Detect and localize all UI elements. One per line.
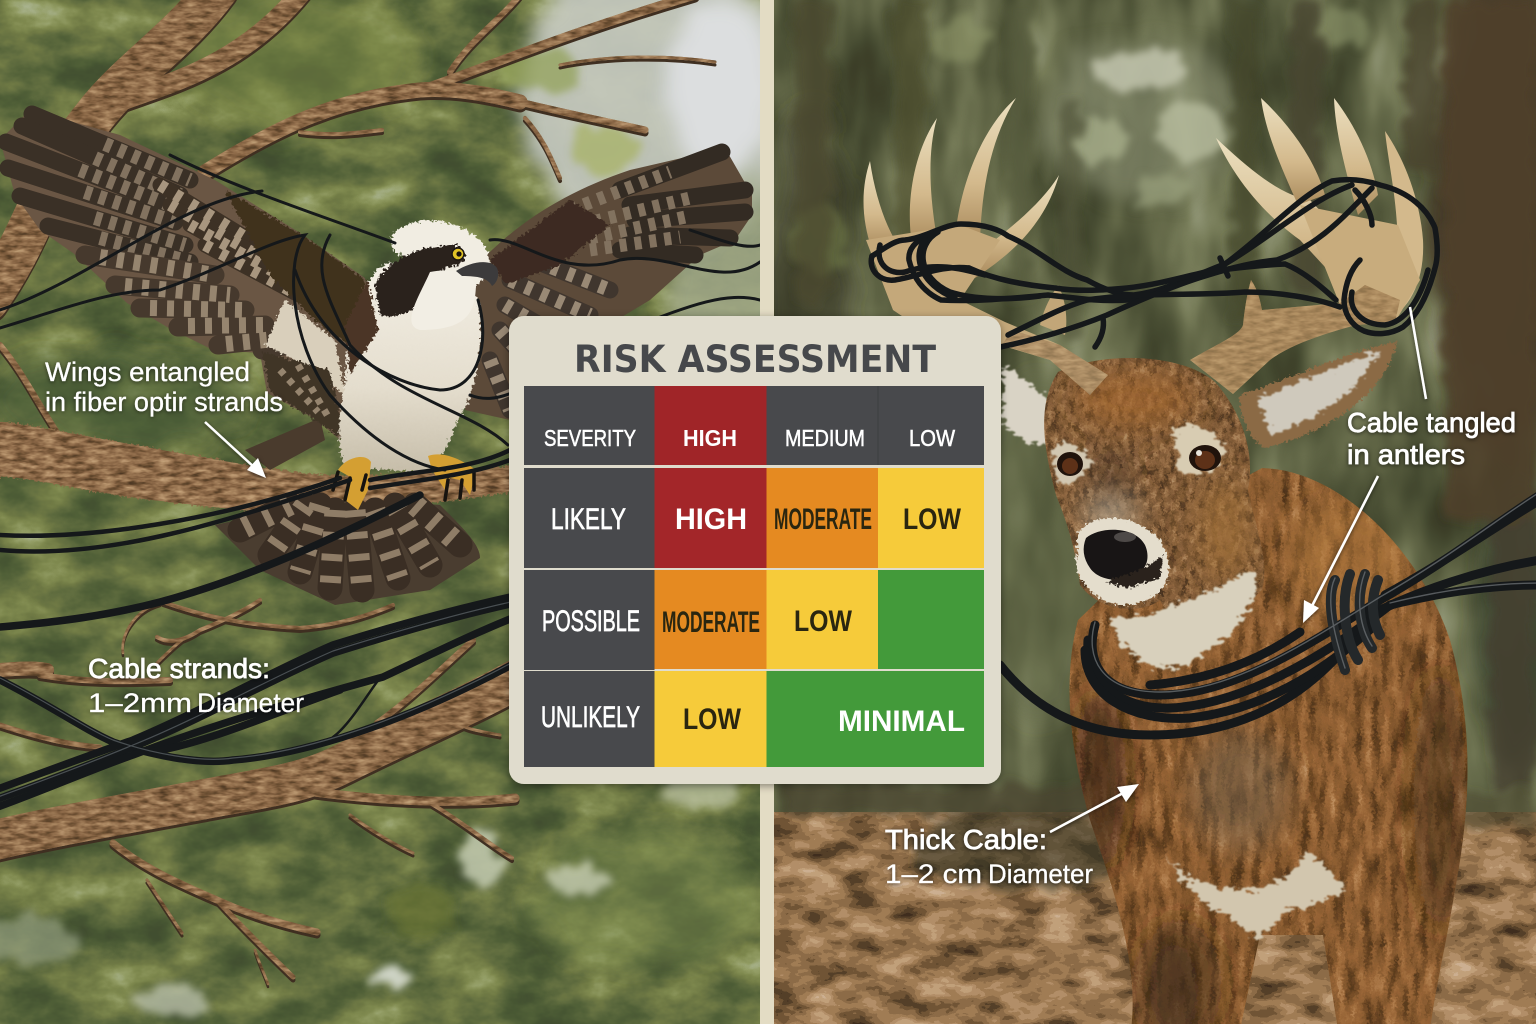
callout: thick cable: Diameter [988,859,1093,889]
row: likely [524,468,984,568]
forest floor [774,812,1536,1024]
row: likely: MODERATE [774,503,872,536]
card background [509,316,1001,784]
right antler [1190,98,1423,394]
row: likely: LIKELY [551,503,626,536]
osprey beak [456,262,498,286]
mouth patch [1105,556,1163,588]
row: possible: LOW [794,605,853,638]
osprey tail [215,418,480,605]
callout: cable tangled in antlers: in antlers [1347,439,1465,470]
undergrowth [780,785,1536,890]
title: RISK ASSESSMENT [574,338,937,381]
deer antlers [864,98,1423,400]
callout: cable strands: 1–2mm [88,688,192,718]
tree trunks [795,0,1536,790]
row: unlikely: UNLIKELY [541,701,640,734]
forest background left [0,0,800,1024]
callout: thick cable: Thick Cable: [885,824,1047,855]
white throat [1112,570,1255,668]
callout: cable tangled in antlers [1347,407,1516,470]
row: possible: MODERATE [662,606,760,639]
body shading [1074,500,1466,1024]
osprey talons [333,454,476,510]
deer eyes [1189,445,1221,471]
fiber optic strands left [0,155,760,808]
row: likely: LOW [903,503,962,536]
header row: LOW [909,425,955,451]
osprey body and head [333,221,498,510]
deer nose [1084,530,1148,580]
callout: wings entangled: Wings entangled [45,357,250,387]
header row: SEVERITY [544,425,636,451]
osprey eye [452,248,464,260]
perch branch [0,418,509,512]
callout: thick cable: 1–2 cm [885,859,982,889]
arrow: thick cable [1050,784,1139,832]
muzzle [1076,518,1169,605]
tree branches [0,0,760,1024]
arrow: wings callout [205,422,266,478]
callout: wings entangled [45,357,283,417]
panel: risk assessment card [509,316,1001,784]
row: possible: POSSIBLE [542,605,640,638]
callout: thick cable [885,824,1093,889]
pale canopy light [790,10,1370,274]
callout: cable tangled in antlers: Cable tangled [1347,407,1516,438]
header row: HIGH [683,425,737,451]
header row: MEDIUM [785,425,865,451]
callout: cable strands [88,653,304,718]
arrow: antler line [1410,307,1426,399]
forest background right [760,0,1536,1024]
row: unlikely: MINIMAL [838,705,965,738]
panel: deer scene [760,0,1536,1024]
arrow: neck cable [1303,476,1378,623]
header row [524,386,984,465]
cable tangled in antlers [871,180,1437,347]
panel: osprey scene [0,0,800,1024]
row: possible [524,570,984,670]
osprey left wing [0,110,380,440]
risk matrix table [524,386,984,767]
thick cable around neck [1000,492,1536,735]
callout: cable strands: Diameter [197,688,304,718]
row: unlikely [524,671,984,767]
callout: wings entangled: in fiber optir strands [45,387,283,417]
divider strip [760,0,774,1024]
osprey right wing [465,148,752,420]
chest patch [1162,850,1347,940]
callout: cable strands: Cable strands: [88,653,270,684]
deer ears [1003,342,1397,448]
antler texture [1000,275,1410,400]
deer body [1040,440,1480,1024]
row: unlikely: LOW [683,703,742,736]
row: likely: HIGH [675,503,747,536]
deer head [1035,350,1275,668]
callouts [45,307,1516,889]
left antler [864,98,1108,395]
eye patches [1172,425,1226,475]
